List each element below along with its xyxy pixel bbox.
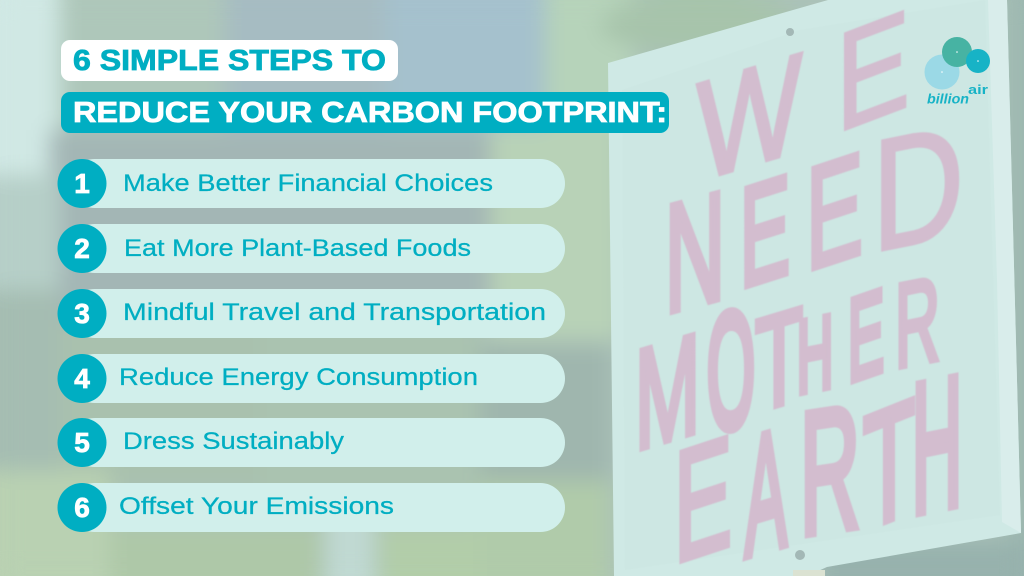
sign lettering: WE NEED MOTHER EARTH: R bbox=[800, 369, 860, 573]
title: line two bbox=[61, 92, 669, 133]
step 6 bbox=[58, 483, 565, 532]
sign pole bbox=[793, 570, 825, 576]
sign lettering: WE NEED MOTHER EARTH: O bbox=[707, 277, 755, 465]
sign lettering: WE NEED MOTHER EARTH: N bbox=[665, 160, 725, 346]
sign lettering: WE NEED MOTHER EARTH: W bbox=[697, 24, 802, 211]
sign lettering: WE NEED MOTHER EARTH: E bbox=[806, 121, 863, 302]
step 6: Offset Your Emissions bbox=[119, 493, 394, 520]
sign right edge band bbox=[988, 0, 1021, 533]
sign lettering: WE NEED MOTHER EARTH: H bbox=[912, 338, 962, 553]
sign nails bbox=[786, 28, 805, 560]
sign lettering: WE NEED MOTHER EARTH: H bbox=[797, 295, 833, 416]
sign lettering: WE NEED MOTHER EARTH bbox=[635, 0, 964, 576]
logo: billion air: air bbox=[968, 82, 988, 97]
sign lettering: WE NEED MOTHER EARTH: E bbox=[848, 265, 884, 407]
title: line two: REDUCE YOUR CARBON FOOTPRINT: bbox=[73, 97, 667, 129]
step 1: Make Better Financial Choices bbox=[123, 170, 493, 197]
photo: protest sign bbox=[608, 0, 1021, 576]
logo: billion air: billion bbox=[927, 90, 969, 106]
step 6: 6 bbox=[74, 492, 90, 523]
step 5 bbox=[58, 418, 565, 467]
step 3 bbox=[58, 289, 565, 338]
title: line one bbox=[61, 40, 398, 81]
sign lettering: WE NEED MOTHER EARTH: E bbox=[740, 146, 790, 319]
step 2: 2 bbox=[74, 233, 90, 264]
step 4 bbox=[58, 354, 565, 403]
title: line one: 6 SIMPLE STEPS TO bbox=[73, 45, 386, 77]
sign lettering: WE NEED MOTHER EARTH: D bbox=[872, 90, 964, 286]
sign shaded area bbox=[622, 0, 1000, 570]
step 4: 4 bbox=[74, 363, 90, 394]
logo: billion air bbox=[924, 37, 990, 106]
step 3: 3 bbox=[74, 298, 90, 329]
sign lettering: WE NEED MOTHER EARTH: T bbox=[863, 364, 915, 564]
step 3: Mindful Travel and Transportation bbox=[123, 299, 546, 326]
step 1 bbox=[58, 159, 565, 208]
step 5: Dress Sustainably bbox=[123, 428, 344, 455]
step 2 bbox=[58, 224, 565, 273]
step 5: 5 bbox=[74, 427, 90, 458]
step 1: 1 bbox=[74, 168, 90, 199]
step 2: Eat More Plant-Based Foods bbox=[124, 235, 471, 262]
sign lettering: WE NEED MOTHER EARTH: T bbox=[755, 280, 803, 441]
sign lettering: WE NEED MOTHER EARTH: M bbox=[635, 304, 700, 481]
sign board bbox=[608, 0, 1021, 576]
step 4: Reduce Energy Consumption bbox=[119, 364, 478, 391]
sign lettering: WE NEED MOTHER EARTH: R bbox=[895, 253, 940, 394]
